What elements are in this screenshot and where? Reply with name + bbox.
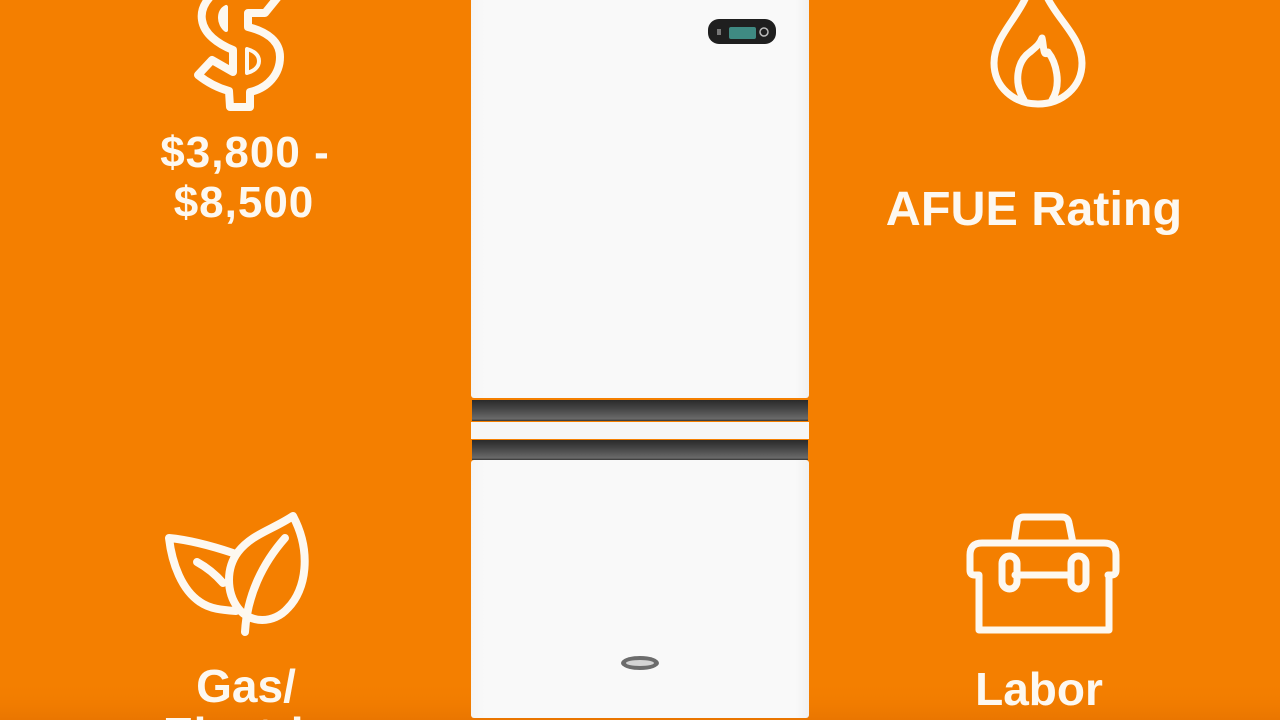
labor block bbox=[970, 517, 1116, 715]
icon: leaves bbox=[169, 516, 305, 632]
upper vent bbox=[472, 400, 808, 421]
floor shading bbox=[0, 680, 1280, 720]
icon: flame bbox=[994, 0, 1082, 104]
fuel type block bbox=[163, 516, 329, 720]
fuel label: Gas/ bbox=[196, 660, 296, 712]
middle white strip bbox=[471, 422, 809, 439]
lower vent bbox=[472, 440, 808, 460]
upper panel bbox=[471, 0, 809, 398]
icon: toolbox bbox=[970, 517, 1116, 630]
cost range text: $8,500 bbox=[174, 178, 314, 227]
lower panel bbox=[471, 460, 809, 718]
AFUE label: AFUE Rating bbox=[886, 182, 1182, 236]
brand badge bbox=[621, 656, 659, 670]
cost range text: $3,800 - bbox=[160, 128, 330, 177]
control display bbox=[708, 19, 776, 44]
icon: dollar sign bbox=[198, 0, 280, 107]
labor label: Labor bbox=[975, 663, 1103, 715]
efficiency block bbox=[886, 0, 1182, 236]
cost block bbox=[160, 0, 330, 227]
furnace unit bbox=[471, 0, 809, 718]
